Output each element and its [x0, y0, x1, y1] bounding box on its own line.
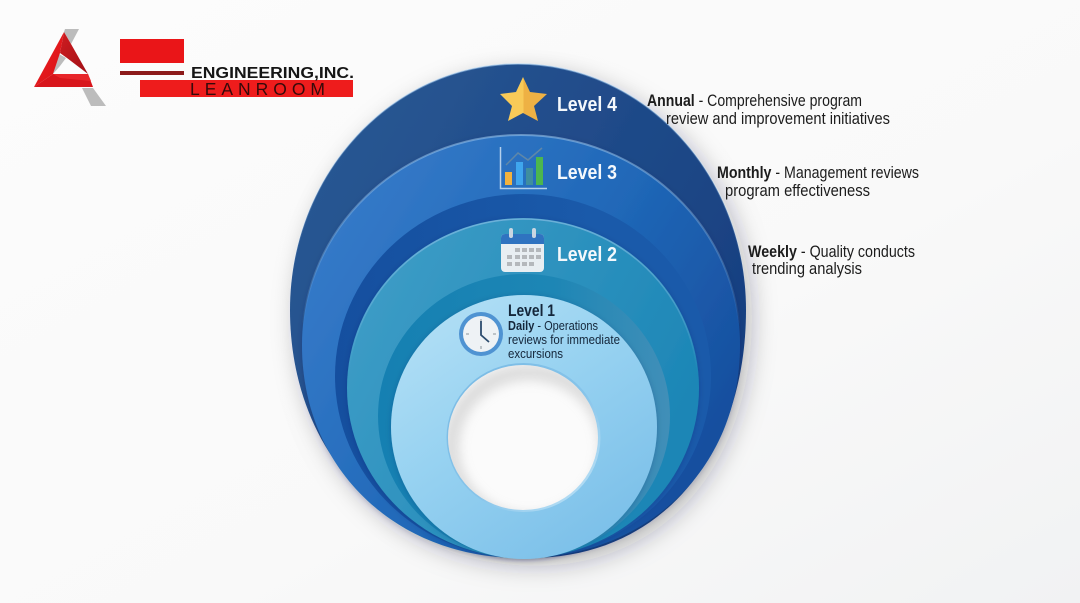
center hole	[446, 363, 600, 512]
label: level 4: Level 4	[557, 94, 618, 116]
label: level 1: Level 1	[508, 301, 555, 320]
icon: bar chart	[500, 147, 547, 188]
annotation: annual: Annual - Comprehensive program	[647, 92, 862, 110]
level 1 text block	[508, 301, 620, 361]
label: level 2: Level 2	[557, 244, 617, 266]
icon: calendar	[501, 228, 544, 272]
icon: clock	[459, 312, 503, 356]
ring: level 1	[391, 295, 657, 559]
ring: level 2	[347, 218, 699, 558]
level 1 text block: excursions	[508, 346, 563, 361]
logo bars	[120, 39, 184, 63]
icon: star	[500, 77, 547, 121]
logo text: Leanroom: LEANROOM	[190, 79, 325, 99]
infographic canvas	[34, 29, 918, 581]
concentric level diagram	[290, 64, 746, 559]
annotation: monthly: Monthly - Management reviews	[717, 164, 919, 182]
ring: level 3	[302, 135, 740, 558]
annotation: monthly	[717, 164, 919, 200]
ring: level 4	[290, 64, 746, 558]
level 1 text block: reviews for immediate	[508, 332, 620, 347]
annotation: monthly: program effectiveness	[725, 182, 870, 200]
label: level 3: Level 3	[557, 162, 617, 184]
annotation: weekly: Weekly - Quality conducts	[748, 243, 915, 261]
logo mark: triangle	[34, 29, 106, 106]
logo text: Engineering, Inc.: ENGINEERING,INC.	[191, 65, 354, 82]
annotation: weekly: trending analysis	[752, 260, 862, 278]
annotation: weekly	[748, 243, 915, 278]
logo: AIC Engineering Leanroom	[34, 29, 354, 106]
annotation: annual	[647, 92, 890, 128]
level 1 description: Daily - Operations	[508, 318, 598, 333]
annotation: annual: review and improvement initiatives	[666, 110, 890, 128]
